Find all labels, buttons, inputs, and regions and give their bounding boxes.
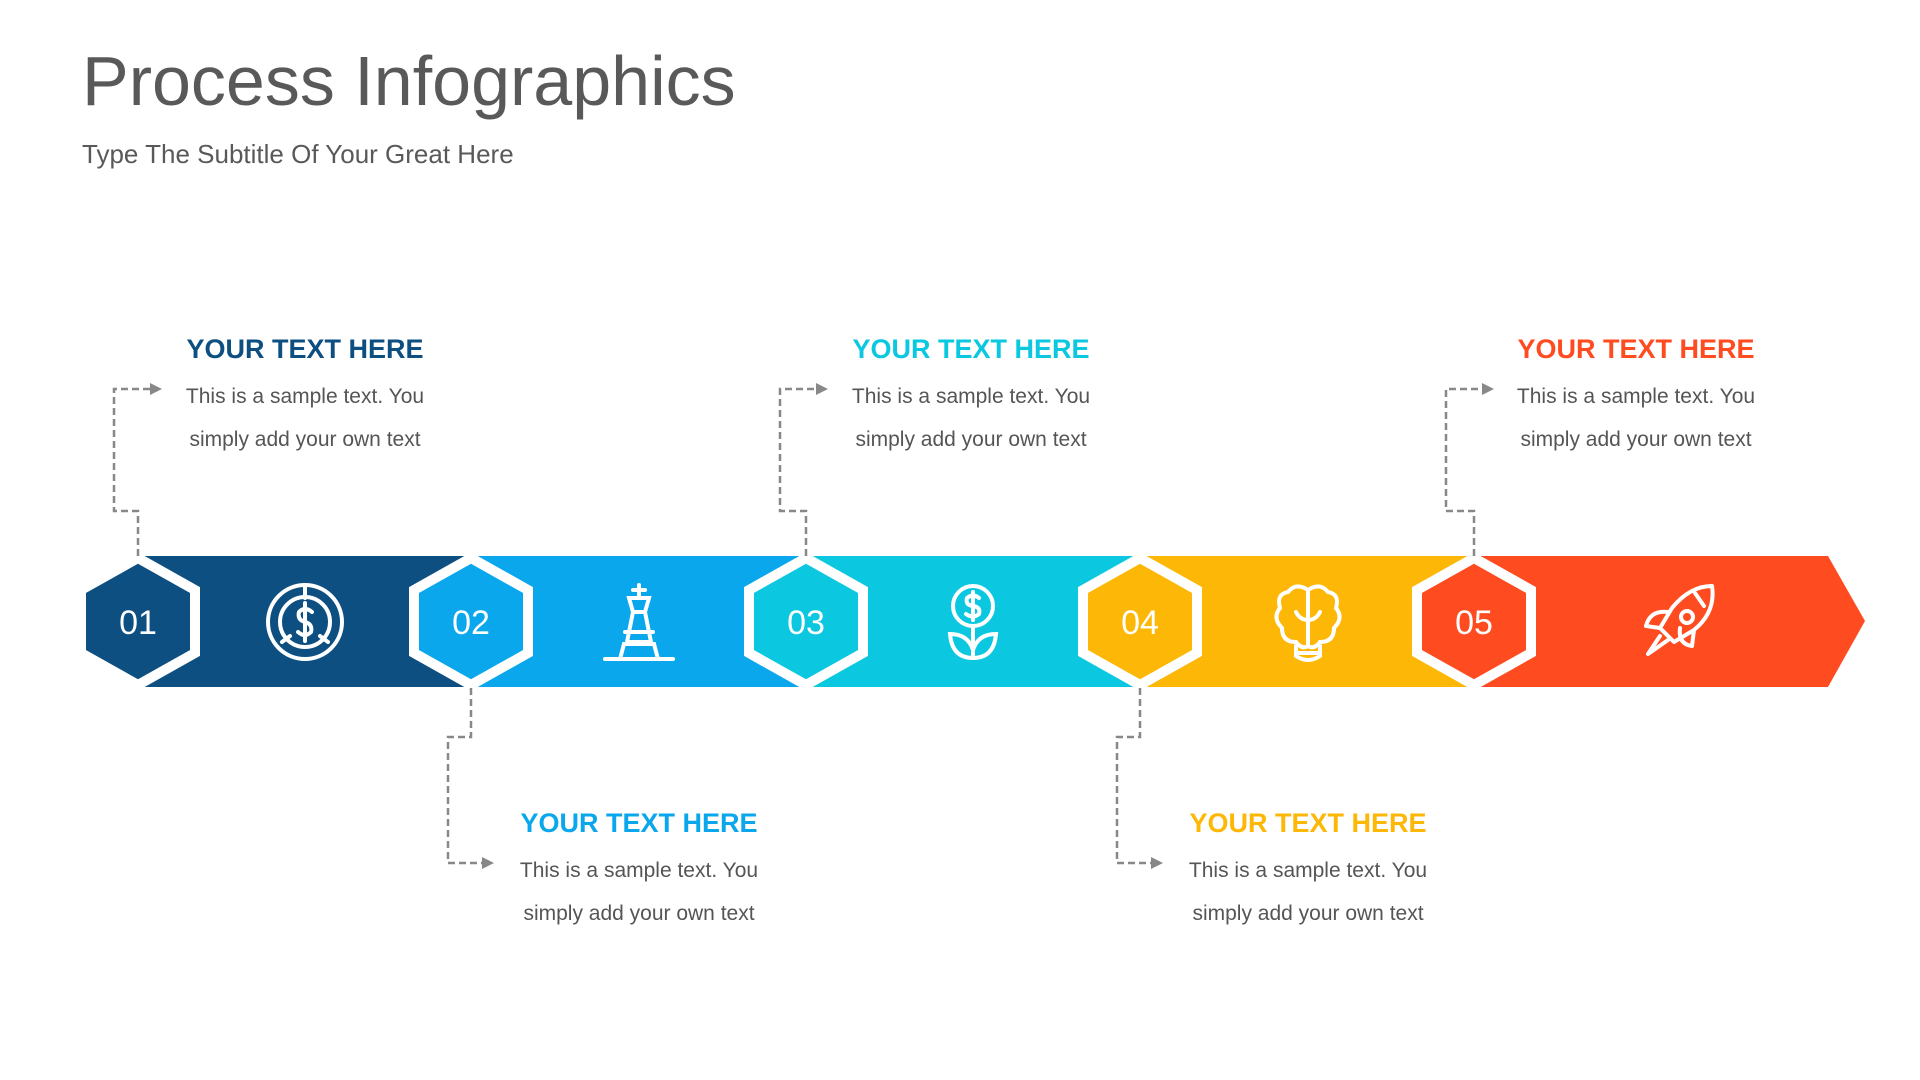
icon: money plant xyxy=(950,586,996,658)
subtitle: Type The Subtitle Of Your Great Here xyxy=(82,139,514,169)
connector 5 xyxy=(1446,383,1494,556)
connector 2 xyxy=(448,688,494,869)
text block 5: YOUR TEXT HERE xyxy=(1517,334,1755,364)
text block 5: simply add your own text xyxy=(1520,428,1752,451)
hexagon 02: 02 xyxy=(452,604,490,642)
title: Process Infographics xyxy=(82,42,736,120)
text block 4: simply add your own text xyxy=(1192,902,1424,925)
text block 1 xyxy=(186,334,424,451)
connector 4 xyxy=(1117,688,1163,869)
hexagon 04 xyxy=(1083,558,1197,685)
text block 4: YOUR TEXT HERE xyxy=(1189,808,1427,838)
text block 2: This is a sample text. You xyxy=(520,859,758,882)
hexagon 02 xyxy=(414,558,528,685)
text block 1: simply add your own text xyxy=(189,428,421,451)
icon: chess king xyxy=(605,585,673,659)
text block 5 xyxy=(1517,334,1755,451)
icon: money target xyxy=(268,585,342,659)
hexagon 03: 03 xyxy=(787,604,825,642)
icon: rocket xyxy=(1646,586,1713,654)
text block 3: This is a sample text. You xyxy=(852,385,1090,408)
hexagon 03 xyxy=(749,558,863,685)
hexagon 04: 04 xyxy=(1121,604,1159,642)
process band xyxy=(140,556,1865,687)
text block 3: YOUR TEXT HERE xyxy=(852,334,1090,364)
text block 4: This is a sample text. You xyxy=(1189,859,1427,882)
hexagon 05 xyxy=(1417,558,1531,685)
text block 2: YOUR TEXT HERE xyxy=(520,808,758,838)
text block 4 xyxy=(1189,808,1427,925)
text block 2 xyxy=(520,808,758,925)
icon: brain bulb xyxy=(1276,586,1340,660)
text block 2: simply add your own text xyxy=(523,902,755,925)
text block 3 xyxy=(852,334,1090,451)
hexagon 01: 01 xyxy=(119,604,157,642)
text block 3: simply add your own text xyxy=(855,428,1087,451)
hexagon 05: 05 xyxy=(1455,604,1493,642)
text block 1: YOUR TEXT HERE xyxy=(186,334,424,364)
text block 1: This is a sample text. You xyxy=(186,385,424,408)
connector 1 xyxy=(114,383,162,556)
connector 3 xyxy=(780,383,828,556)
text block 5: This is a sample text. You xyxy=(1517,385,1755,408)
hexagon 01 xyxy=(81,558,195,685)
